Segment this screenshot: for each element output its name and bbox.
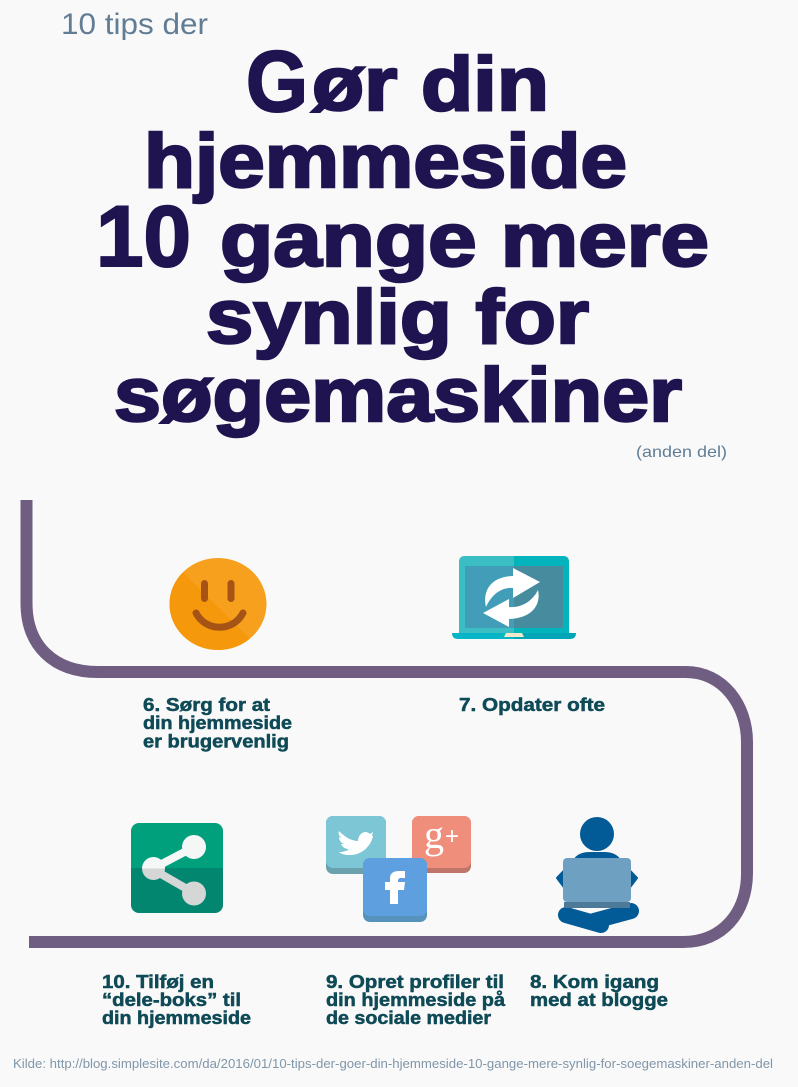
icon: google plus: g	[424, 812, 444, 857]
tip 9 label: de sociale medier	[326, 1008, 491, 1028]
tip 9 label	[326, 972, 506, 1028]
tip 6 label: 6. Sørg for at	[143, 695, 270, 715]
title: 10	[96, 189, 191, 285]
icon: person with laptop	[557, 817, 637, 925]
title: G	[246, 34, 308, 130]
tip 9 label: 9. Opret profiler til	[326, 972, 504, 992]
icon: share	[131, 823, 223, 913]
tip 10 label: “dele-boks” til	[102, 990, 241, 1010]
tip 8 label	[530, 972, 668, 1010]
title: synlig for	[206, 275, 589, 360]
icon: social media tiles	[326, 812, 471, 922]
tip 6 label: er brugervenlig	[143, 732, 289, 752]
title: hjemmeside	[144, 119, 627, 204]
subtitle note: (anden del)	[636, 444, 727, 461]
icon: google plus	[412, 812, 471, 873]
tip 10 label	[102, 972, 251, 1028]
icon: twitter	[326, 816, 386, 874]
tip 8 label: 8. Kom igang	[530, 972, 659, 992]
tip 10 label: 10. Tilføj en	[102, 972, 214, 992]
title: ør din	[312, 42, 549, 127]
icon: smiley	[170, 558, 266, 650]
title: søgemaskiner	[114, 353, 682, 438]
icon: laptop with refresh arrows	[452, 556, 576, 639]
title: gange mere	[220, 198, 709, 283]
tip 6 label: din hjemmeside	[143, 713, 292, 733]
icon: facebook	[363, 858, 427, 922]
tip 9 label: din hjemmeside på	[326, 990, 506, 1010]
tip 8 label: med at blogge	[530, 990, 668, 1010]
tip 7 label: 7. Opdater ofte	[459, 695, 605, 715]
title	[96, 34, 709, 438]
icon: google plus: +	[445, 823, 459, 850]
tip 10 label: din hjemmeside	[102, 1008, 251, 1028]
intro text: 10 tips der	[61, 8, 208, 41]
tip 6 label	[143, 695, 292, 752]
source line: Kilde: http://blog.simplesite.com/da/2016/01/10-tips-der-goer-din-hjemmeside-10-gange-mere-synlig-for-soegemaskiner-anden-del	[13, 1057, 773, 1071]
timeline path	[26, 500, 747, 942]
